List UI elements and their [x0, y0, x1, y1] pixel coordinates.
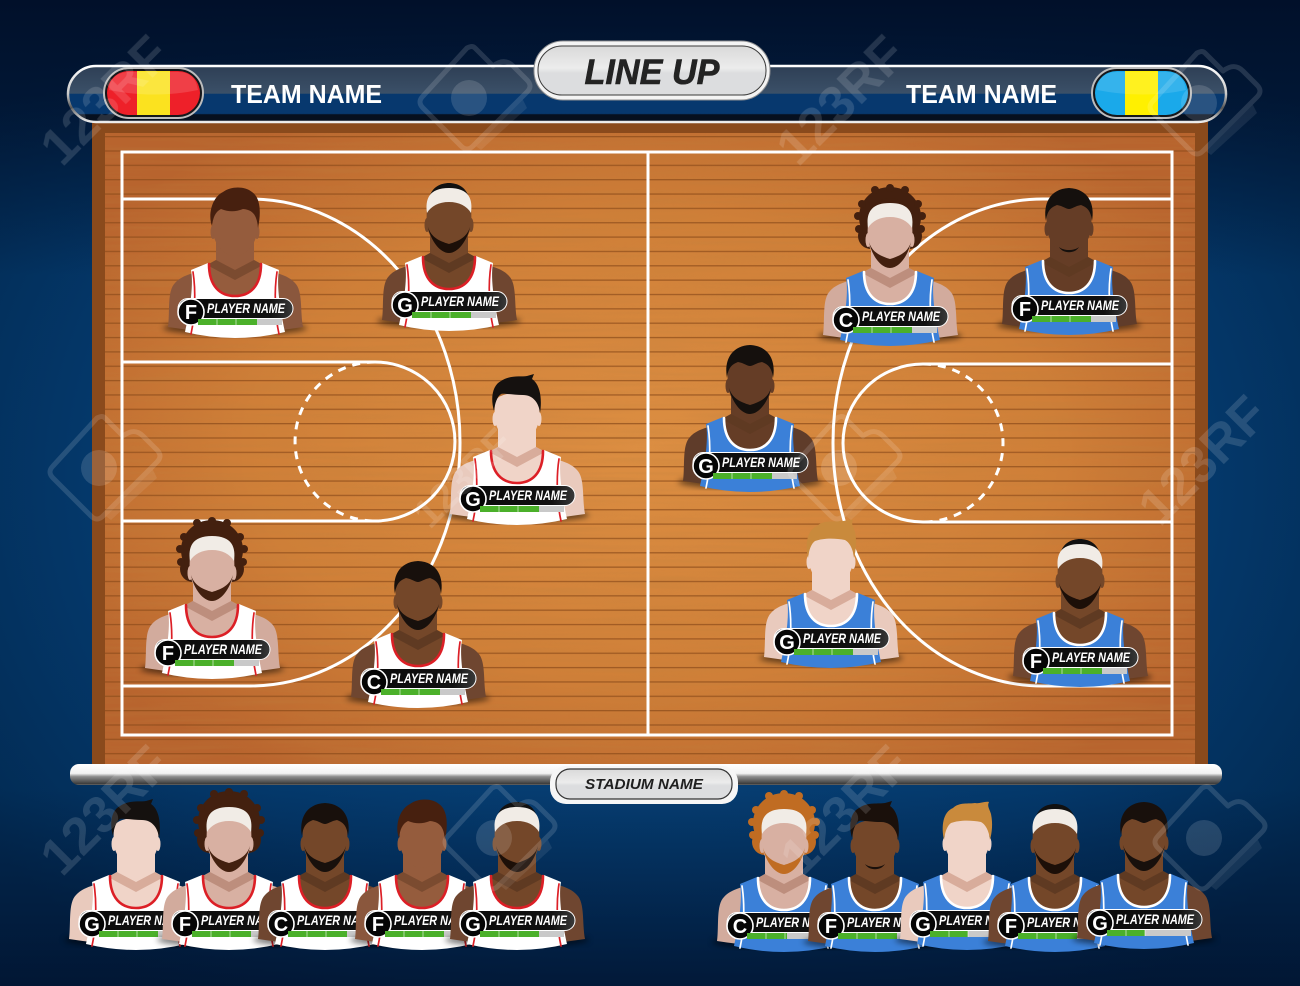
player: right team G blond: G [779, 632, 795, 654]
player: right team F headband: F [1030, 651, 1042, 673]
player: right team F headband: PLAYER NAME [1052, 649, 1131, 665]
player: right team F [997, 188, 1141, 335]
player: left team F: F [185, 302, 197, 324]
player: left team G headband [377, 183, 521, 331]
bench player 1: PLAYER NAME [108, 912, 187, 928]
bench player 10: G [1092, 913, 1108, 935]
basketball court [92, 118, 1208, 766]
bench player 6: PLAYER NAME [756, 914, 835, 930]
player: right team F: F [1019, 299, 1031, 321]
player: right team C curly: C [839, 310, 853, 332]
bench player 4 [350, 800, 494, 950]
player: left team C: C [367, 672, 381, 694]
bench player 5: G [465, 914, 481, 936]
player: left team F curly: F [162, 643, 174, 665]
player: left team G light skin: PLAYER NAME [489, 487, 568, 503]
bench player 7 [803, 801, 947, 952]
bench player 8: PLAYER NAME [939, 912, 1018, 928]
bench player 9: F [1005, 916, 1017, 938]
player: left team G light skin [445, 374, 589, 525]
bench player 1 [64, 799, 208, 950]
player: right team G beard [678, 345, 822, 492]
bench player 1: G [84, 914, 100, 936]
player: right team G blond: PLAYER NAME [803, 630, 882, 646]
bench player 5 [445, 802, 589, 950]
bench player 8: G [915, 914, 931, 936]
right team flag [1092, 68, 1191, 118]
watermark: 123RF [405, 420, 521, 536]
watermark: 123RF [765, 25, 917, 176]
stadium plate: STADIUM NAME [585, 776, 704, 793]
bench player 5: PLAYER NAME [489, 912, 568, 928]
watermark: 123RF [29, 25, 181, 176]
player: right team G beard: G [698, 456, 714, 478]
player: right team G beard: PLAYER NAME [722, 454, 801, 470]
left team name: TEAM NAME [231, 79, 382, 109]
header bar [68, 66, 1226, 122]
right team name: TEAM NAME [906, 79, 1057, 109]
title plate: LINE UP [584, 53, 720, 92]
bench player 7: PLAYER NAME [847, 914, 926, 930]
watermark: 123RF [769, 735, 921, 886]
bench player 4: F [372, 914, 384, 936]
player: left team F curly [140, 517, 284, 679]
bench player 3 [253, 803, 397, 950]
stadium plate [550, 766, 738, 804]
bench player 3: PLAYER NAME [297, 912, 376, 928]
bench player 6 [712, 790, 856, 952]
bench player 7: F [825, 916, 837, 938]
player: left team C: PLAYER NAME [390, 670, 469, 686]
watermark: 123RF [29, 735, 181, 886]
title plate [534, 41, 770, 100]
right team bench [712, 790, 1216, 952]
player: right team G blond [759, 520, 903, 668]
bench player 9: PLAYER NAME [1027, 914, 1106, 930]
bench player 2 [157, 788, 301, 950]
player: right team F: PLAYER NAME [1041, 297, 1120, 313]
player: left team F curly: PLAYER NAME [184, 641, 263, 657]
player: left team G headband: G [397, 295, 413, 317]
left team bench [64, 788, 589, 950]
player: right team C curly [818, 184, 962, 346]
player: left team C [346, 561, 490, 708]
bench player 9 [983, 804, 1127, 952]
watermark: 123RF [1127, 385, 1279, 536]
bottom rail [70, 764, 1222, 785]
bench player 2: F [179, 914, 191, 936]
bench player 10 [1072, 802, 1216, 949]
player: right team F headband [1008, 539, 1152, 687]
player: left team F [163, 188, 307, 338]
bench player 2: PLAYER NAME [201, 912, 280, 928]
bench player 4: PLAYER NAME [394, 912, 473, 928]
bench player 6: C [733, 916, 747, 938]
bench player 8 [895, 802, 1039, 950]
bench player 10: PLAYER NAME [1116, 911, 1195, 927]
player: right team C curly: PLAYER NAME [862, 308, 941, 324]
bench player 3: C [274, 914, 288, 936]
player: left team G headband: PLAYER NAME [421, 293, 500, 309]
left team flag [104, 68, 203, 118]
player: left team F: PLAYER NAME [207, 300, 286, 316]
player: left team G light skin: G [465, 489, 481, 511]
